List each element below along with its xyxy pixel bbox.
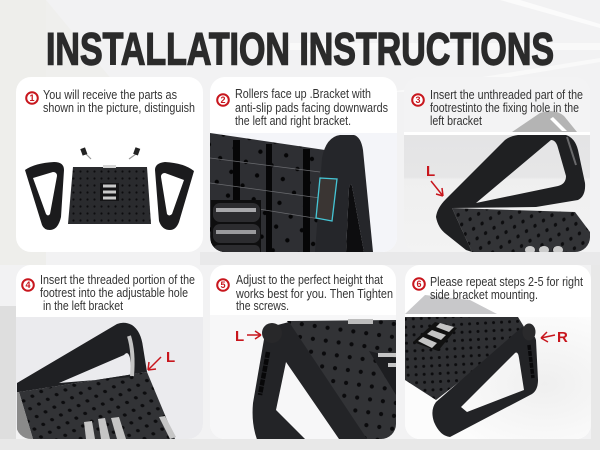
step 3 number: 3 <box>415 95 421 105</box>
cyan highlight on anti-slip pad <box>316 178 337 221</box>
label L: L <box>426 163 435 180</box>
step 5 text: works best for you. Then Tighten <box>235 286 393 301</box>
step 2 text <box>235 86 388 128</box>
step 4 text: footrest into the adjustable hole <box>40 285 188 300</box>
left bracket <box>25 162 64 230</box>
step 1 text: shown in the picture, distinguish <box>43 100 195 115</box>
step 1 text <box>43 87 195 115</box>
right bracket <box>155 162 194 230</box>
step 3 text: left bracket <box>430 113 482 128</box>
footrest plate <box>68 165 151 224</box>
panel: step 2 <box>210 77 397 257</box>
label L: L <box>235 328 244 345</box>
step 1 number <box>26 92 38 104</box>
step 4 photo <box>16 317 203 439</box>
step 2 text: anti-slip pads facing downwards <box>235 100 388 115</box>
label R: R <box>557 329 568 346</box>
label L: L <box>166 349 175 366</box>
arrow to left bracket <box>148 357 161 370</box>
step 5 number: 5 <box>220 280 226 290</box>
step 4 number: 4 <box>25 280 31 290</box>
step 2 number <box>217 94 229 106</box>
step 1 number: 1 <box>29 93 35 103</box>
step 6 number: 6 <box>416 279 422 289</box>
step 3 number <box>412 94 424 106</box>
screws <box>80 147 140 159</box>
step 2 photo <box>210 133 397 257</box>
step 6 number <box>413 278 425 290</box>
arrow to knob <box>247 331 261 339</box>
step 5 text <box>235 272 393 313</box>
step 2 text: the left and right bracket. <box>235 113 351 128</box>
step 5 number <box>217 279 229 291</box>
step 3 text <box>430 87 583 128</box>
panel: step 6 <box>405 265 591 439</box>
panel: step 1 <box>16 77 203 252</box>
step 5 text: the screws. <box>236 298 289 313</box>
knob <box>524 324 536 336</box>
step 6 photo <box>405 295 591 439</box>
step 4 number <box>22 279 34 291</box>
step 4 text: in the left bracket <box>43 298 123 313</box>
step 2 number: 2 <box>220 95 226 105</box>
arrow to left bracket <box>431 181 443 196</box>
panel: step 5 <box>210 265 396 445</box>
panel: step 4 <box>16 265 203 439</box>
step 4 text <box>40 272 195 313</box>
step 3 photo <box>404 111 590 254</box>
step 5 photo <box>252 319 396 439</box>
knob <box>262 323 278 339</box>
step 6 text: side bracket mounting. <box>430 287 538 302</box>
step 1 text: You will receive the parts as <box>43 87 177 102</box>
step 4 text: Insert the threaded portion of the <box>40 272 195 287</box>
panel: step 3 <box>404 77 590 254</box>
step 2 text: Rollers face up .Bracket with <box>235 86 371 101</box>
arrow to knob <box>541 332 555 342</box>
step 5 text: Adjust to the perfect height that <box>236 272 383 287</box>
step 6 text <box>430 274 583 302</box>
